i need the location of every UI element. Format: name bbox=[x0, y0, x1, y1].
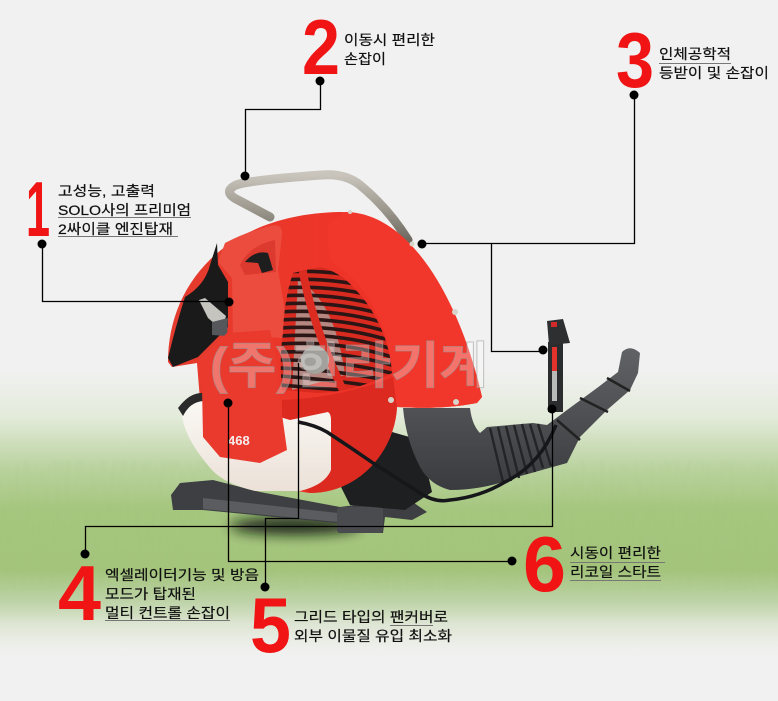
black engine recess bbox=[168, 243, 228, 367]
callout 6: recoil starter: 시동이 편리한 bbox=[570, 545, 661, 561]
callout 2: carrying handle bbox=[302, 3, 435, 91]
callout 5: grid fan cover: 5 bbox=[250, 581, 291, 669]
callout 3: ergonomic backrest bbox=[616, 16, 769, 104]
red blower housing bbox=[168, 212, 482, 493]
blower machine illustration bbox=[168, 175, 640, 535]
callout 4: multi-control handle bbox=[58, 549, 259, 637]
callout 1: engine: 2싸이클 엔진탑재 bbox=[58, 221, 173, 237]
cable bbox=[298, 422, 556, 501]
carrying handle bbox=[229, 175, 408, 240]
callout 2: carrying handle: 2 bbox=[302, 3, 340, 91]
leader lines bbox=[42, 81, 634, 587]
engine intake knob bbox=[245, 252, 273, 273]
callout 3: ergonomic backrest: 3 bbox=[616, 16, 654, 104]
callout 5: grid fan cover: 그리드 타입의 팬커버로 bbox=[294, 609, 448, 625]
fan cover grille bbox=[280, 262, 395, 397]
engine cover panel bbox=[218, 225, 287, 338]
callout 2: carrying handle: 손잡이 bbox=[344, 51, 386, 67]
grass texture bbox=[0, 460, 778, 590]
callout 6: recoil starter bbox=[523, 520, 665, 608]
ground shadow bbox=[230, 517, 360, 535]
callout 5: grid fan cover: 외부 이물질 유입 최소화 bbox=[294, 628, 452, 644]
callout 4: multi-control handle: 4 bbox=[58, 549, 101, 637]
volute highlight bbox=[327, 212, 482, 408]
bolts bbox=[348, 210, 459, 405]
callout 4: multi-control handle: 멀티 컨트롤 손잡이 bbox=[105, 605, 230, 621]
callout dots bbox=[38, 76, 638, 592]
callout 5: grid fan cover bbox=[250, 581, 452, 669]
blower hose and nozzle bbox=[403, 348, 640, 490]
engine dark parts bbox=[340, 430, 432, 510]
callout 2: carrying handle: 이동시 편리한 bbox=[344, 32, 435, 48]
watermark: company name: (주)한라기계 bbox=[210, 338, 488, 394]
callout 6: recoil starter: 6 bbox=[523, 520, 566, 608]
callout 4: multi-control handle: 모드가 탑재된 bbox=[105, 586, 196, 602]
callout 1: engine: 고성능, 고출력 bbox=[58, 183, 155, 199]
callout 1: engine bbox=[26, 165, 191, 253]
model label: 468: 468 bbox=[228, 433, 250, 448]
front control panel bbox=[197, 330, 287, 463]
callout 1: engine: SOLO사의 프리미엄 bbox=[58, 202, 191, 218]
callout 1: engine: 1 bbox=[26, 165, 50, 253]
callout 3: ergonomic backrest: 등받이 및 손잡이 bbox=[659, 65, 769, 81]
base frame bbox=[171, 480, 427, 533]
callout 3: ergonomic backrest: 인체공학적 bbox=[659, 46, 731, 62]
callout 4: multi-control handle: 엑셀레이터기능 및 방음 bbox=[105, 567, 259, 583]
remote throttle grip bbox=[547, 319, 570, 412]
lower disc shading bbox=[282, 377, 397, 493]
knob recess bbox=[240, 240, 276, 275]
callout 6: recoil starter: 리코일 스타트 bbox=[570, 564, 661, 580]
fuel tank bbox=[178, 393, 331, 491]
